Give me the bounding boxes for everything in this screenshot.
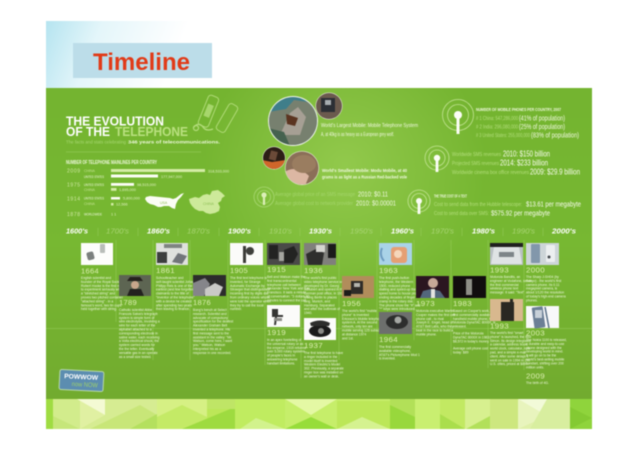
- stat: SMS prices: Average global cost to network provider: [275, 201, 353, 207]
- card: 2003: 2003: [526, 330, 545, 338]
- card: 1963: The phone show the "#" and: [379, 303, 421, 307]
- card: 1919: answering telephone: [267, 358, 298, 362]
- card: 1937: a ringer included in the: [304, 355, 338, 359]
- timeline decade header: 1860's: [147, 226, 170, 236]
- card: 1861: 1861: [156, 268, 175, 275]
- card: 1905: The first text telephone is: [230, 276, 267, 280]
- card: 2000: Sanyo) - the world's first: [526, 279, 561, 283]
- card: 1876: invented a telephone. His: [193, 328, 231, 332]
- map: United States: USA: [160, 201, 168, 205]
- card: 1993 pager: message: It said: "Text": [490, 291, 525, 295]
- card: 2000: of today's high-end camera: [526, 294, 566, 298]
- infographic heading: OF THE: [66, 125, 110, 139]
- stat: mobile phones per country: (41% of population): [519, 116, 565, 122]
- timeline decade header: [66, 226, 576, 236]
- timeline decade header: 1950's: [350, 226, 373, 236]
- stat: SMS revenues: Projected SMS revenues: [452, 161, 499, 167]
- card: 1905: they try to call the local: [230, 303, 264, 307]
- row: 1914: 12,566: [116, 202, 128, 206]
- card: 2000: [526, 243, 566, 302]
- card: 1964: is invented.: [379, 357, 396, 361]
- card: 1664: to experiment seriously with: [81, 288, 122, 292]
- stat: SMS revenues: Worldwide cinema box office revenues: [452, 170, 529, 176]
- map: China: CHINA: [203, 202, 215, 206]
- card: 1789: as a small size tested.: [119, 355, 152, 359]
- icon: antenna, SMS revenues: [425, 146, 449, 172]
- card: 1993 smartphone: Simon. Its design integrates: [490, 339, 531, 343]
- card: 1937: [304, 318, 344, 378]
- card: 1789: the the letter. Eventually: [119, 347, 155, 351]
- card: 1876: [193, 275, 233, 355]
- row: 1914: 5,800,000: [123, 196, 140, 200]
- card: 1789: Catholic scientist Abbe: [119, 308, 152, 312]
- card: 1915: first transcontinental: [267, 279, 297, 283]
- row: 2009: UNITED STATES: [84, 175, 104, 179]
- card: 1956: Ericsson's Mobile telephone: [342, 317, 383, 321]
- chart: telephone mainlines per country: [66, 160, 229, 218]
- timeline decade header: 1980's: [472, 226, 495, 236]
- card: 1905: Automatic Exchange by: [230, 284, 265, 288]
- card: 1983: Motorola DynaTAC 8000X, is: [453, 321, 496, 325]
- chart: telephone mainlines per country: NUMBER OF TELEPHONE MAINLINES PER COUNTRY: [66, 160, 157, 166]
- card: 1956: system A. At the second: [342, 321, 377, 325]
- card: 1983: [453, 276, 496, 354]
- card: 1919: the emperor, 1919 reforms: [267, 346, 306, 350]
- callout: largest mobile: A, at 40kg is as heavy as a European grey wolf.: [321, 132, 394, 138]
- card: 1956: 1956: [342, 301, 361, 308]
- card: 1963: speed home to house process: [379, 292, 424, 296]
- stat: SMS prices: Average global price of an SMS message: [275, 192, 355, 198]
- card: 1664: Robert Hooke is the first man: [81, 284, 124, 288]
- card: 1963: [379, 243, 424, 311]
- card: 1876: response in one recorded.: [193, 351, 231, 355]
- stat: SMS revenues: Worldwide SMS revenues: [452, 152, 501, 158]
- card: 1664: 1664: [81, 268, 99, 276]
- row: 1914: UNITED STATES: [84, 196, 104, 200]
- stat: SMS prices: [275, 192, 396, 208]
- card: 1956: The world's first "mobile: [342, 309, 377, 313]
- icon: telephone handset outline: [194, 94, 239, 133]
- card: 1936: Hamburg. Separated: [304, 303, 335, 307]
- card: 1963: telephone, the Western: [379, 280, 413, 284]
- card: 1861: self-taught scientist Johann: [156, 280, 196, 284]
- card: 1919: of people's faces in: [267, 354, 295, 358]
- card: 1915: telephone call between: [267, 283, 301, 287]
- card: 1861: with a device he created: [156, 299, 192, 303]
- card: 1861: [156, 243, 196, 311]
- stat: SMS revenues: 2009: $29.9 billion: [530, 168, 580, 176]
- card: 1876: interpreted his as a: [193, 347, 221, 351]
- card: 1789: versatile gas in an operate: [119, 351, 158, 355]
- photo: mouse in hand: [285, 151, 319, 186]
- card: 1915: of conversation: "3 dollars 90: [267, 294, 310, 298]
- card: 1861: after spending two years: [156, 303, 192, 307]
- row: 1975: [67, 182, 156, 192]
- card: 1983: Price of the Motorola: [453, 332, 484, 336]
- timeline decade header: 1990's: [512, 226, 535, 236]
- card: 1973: beat in the race to build a: [416, 328, 453, 332]
- slide title: Timeline: Timeline: [93, 49, 190, 76]
- card: 1664: a "stretched string" and: [81, 292, 115, 296]
- card: 1937: 1937: [304, 343, 323, 350]
- card: 1936: [304, 243, 346, 315]
- card: 1789: 1789: [119, 300, 137, 307]
- card: 1936: Schubert and opened in the: [304, 288, 345, 292]
- card: 1973: 1973: [416, 301, 435, 308]
- card: 1876: you." Watson, Watson: [193, 343, 225, 347]
- card: 1789: saline water, each receiving: [119, 335, 160, 339]
- card: 1993 pager: engineer at Vodafone, sends: [490, 279, 532, 283]
- card: 1983: Average cell phone cost: [453, 346, 488, 350]
- card: 2003: developing world in mind.: [526, 350, 563, 354]
- card: 1876: specification for the deafest: [193, 320, 233, 324]
- card: 1905: Strowger that distinguished: [230, 288, 270, 292]
- card: 1789: Francois Salva's telegraph: [119, 312, 158, 316]
- card: 1664: founder of the Royal Society: [81, 280, 123, 284]
- card: 1964: AT&T's Picturephone Mod 1: [379, 353, 420, 357]
- card: 1936: German post office, in 1936,: [304, 292, 345, 296]
- card: 1876: assistant in the valley: "Mr.: [193, 335, 232, 339]
- card: 1973: mobile phone.: [416, 332, 437, 336]
- card: 1876: Alexander Graham Bell: [193, 324, 227, 328]
- card: 1915: 1915: [267, 267, 286, 274]
- footer triangle band: [46, 399, 592, 429]
- card: 1789: [119, 275, 160, 359]
- card: 1973: Joseph E. Engel, head of: [416, 321, 453, 325]
- card: 1664: English scientist and: [81, 276, 111, 280]
- card: 1993 smartphone: The world's first "smart: [490, 331, 523, 335]
- row: 1914: [67, 196, 140, 206]
- stat: true cost of a text: $575.92 per megabyte: [491, 208, 550, 218]
- stat: true cost of a text: Cost to send data from the Hubble telescope:: [434, 202, 522, 208]
- card: 1915: Alexander New York and San: [267, 287, 310, 291]
- card: 1964: 1964: [379, 337, 398, 344]
- card: 1919: over 5,000 rotary systems: [267, 350, 305, 354]
- icon: antenna, mobile phones: [442, 100, 474, 134]
- card: 2003: a durable and easy-to-use: [526, 342, 564, 346]
- card: 2000: megapixel camera, is: [526, 287, 558, 291]
- card: 1876: research. Scientist and: [193, 312, 227, 316]
- stat: true cost of a text: Cost to send data over SMS:: [434, 211, 489, 217]
- card: 1936: 1940.: [304, 311, 312, 315]
- card: 1973: [416, 276, 455, 336]
- card: 1973: Motorola executive Martin: [416, 309, 454, 313]
- timeline decade header: 1870's: [187, 226, 210, 236]
- card: 1936: linking Berlin to places: [304, 296, 337, 300]
- card: 1905: invented, for Strange: [230, 280, 261, 284]
- card: 1993 smartphone: phone" is launched, the IBM: [490, 335, 531, 339]
- card: 1915: Bell and Watson make the: [267, 275, 306, 279]
- stat: true cost of a text: THE TRUE COST OF A TEXT: [434, 194, 467, 198]
- stat: mobile phones per country: # 1 China: 547,286,000: [476, 116, 518, 122]
- row: 1878: [67, 212, 116, 218]
- card: 1963: cramp in the rotary dial.: [379, 299, 414, 303]
- card: 1993 pager: [490, 243, 532, 295]
- card: 1915: minutes to connect the call.: [267, 298, 307, 302]
- card: 1876: Watson, come here, I want: [193, 339, 232, 343]
- card: 1983: $8,572 in today's money.: [453, 339, 489, 343]
- card: 1963: ending decades of finger: [379, 296, 416, 300]
- card: 1956: mobile serving 125 subscrib: [342, 328, 383, 332]
- card: 1983: DynaTAC 8000X in 1983:: [453, 336, 490, 340]
- card: 1993 smartphone: client. After some delays it: [490, 354, 528, 358]
- stat: true cost of a text: [434, 194, 581, 218]
- card: 2003: million units.: [526, 365, 544, 369]
- card: 1993 smartphone: [490, 299, 531, 366]
- card: 1956: and 1st.: [342, 336, 354, 340]
- card: 1983: today: $89: [453, 350, 469, 354]
- photo: wolf comparison: [268, 96, 318, 146]
- timeline decade header: 1960's: [391, 226, 414, 236]
- card: 1963: 1963: [379, 268, 398, 275]
- card: 1937: an owner's wall or desk.: [304, 374, 339, 378]
- card: 2003: [526, 306, 567, 369]
- callout: largest mobile: [321, 123, 418, 138]
- row: 1975: 98,515,000: [137, 183, 156, 187]
- card: 1664: held together with string.: [81, 307, 117, 311]
- row: 2009: 177,947,000: [161, 175, 182, 179]
- card: 1861: claimants to the title of: [156, 292, 189, 296]
- stat: SMS revenues: 2014: $233 billion: [500, 158, 548, 168]
- row: 1975: 1975: [67, 182, 80, 188]
- callout: smallest mobile: [322, 168, 407, 180]
- map: United States: [145, 193, 184, 209]
- stat: mobile phones per country: (25% of population): [519, 124, 565, 131]
- card: 1876: first message sent to the: [193, 331, 229, 335]
- card: 1993 smartphone: 1993: [490, 324, 509, 330]
- stat: SMS revenues: 2010: $150 billion: [503, 150, 550, 158]
- slide title: Timeline: [73, 43, 212, 78]
- card: 1983: first commercially available: [453, 313, 493, 317]
- stat: true cost of a text: $13.61 per megabyte: [526, 200, 581, 208]
- photo: large mobile radio: [315, 92, 343, 120]
- card: 1964: [379, 312, 420, 361]
- card: 2003: world's best-selling mobile: [526, 358, 565, 362]
- card: 1993 smartphone: pad, and a simple e-mail: [490, 350, 526, 354]
- card: 1789: a Volta electrical shock, the: [119, 339, 159, 343]
- card: 1937: 302. Previously, a separate: [304, 367, 344, 371]
- callout: smallest mobile: World's Smallest Mobile: Modu Mobile, at 40: [322, 168, 407, 173]
- row: 1878: 1878: [67, 212, 80, 218]
- card: 1963: 1500, reduced phone: [379, 284, 410, 288]
- card: 1861: Philipp Reis is one of the: [156, 284, 192, 288]
- card: 1964: The first commercially: [379, 345, 411, 349]
- card: 1963: The first push-button: [379, 276, 409, 280]
- card: 1861: "inventor of the telephone": [156, 296, 195, 300]
- timeline decade header: 1930's: [309, 226, 332, 236]
- timeline decade header: 1600's: [66, 226, 88, 236]
- stat: mobile phones per country: (83% of population): [531, 132, 579, 140]
- card: 1973: Cooper makes the first cell: [416, 313, 455, 317]
- card: 1919: [267, 305, 306, 365]
- card: 1919: In an apex foretelling of: [267, 338, 301, 342]
- card: 1983: handheld mobile phone, the: [453, 317, 494, 321]
- row: 1975: UNITED STATES: [84, 183, 104, 187]
- card: 2000: The Sharp J-SH04 (by: [526, 275, 559, 279]
- card: 1937: ringer box was installed on: [304, 370, 343, 374]
- card: 1956: phone" is invented: [342, 313, 369, 317]
- card: 1983: Based on Cooper's work, the: [453, 309, 495, 313]
- card: 2000: phones.: [526, 298, 538, 302]
- logo: Powwow Now: [59, 369, 104, 392]
- stat: mobile phones per country: # 2 India: 296,080,000: [476, 124, 518, 130]
- card: 1973: phone call - to rival: [416, 317, 444, 321]
- photo: tiny phone in hand: [262, 146, 286, 170]
- card: 1956: at distance 1974: [342, 332, 366, 336]
- card: 2003: The Nokia 1100 is released,: [526, 338, 567, 342]
- row: 1878: 1 1: [111, 212, 116, 216]
- card: 2009: [526, 374, 549, 385]
- card: 2009: 2009: [526, 374, 545, 380]
- card: 1936: developed by Dr. Georg: [304, 284, 339, 288]
- timeline decade header: 1900's: [228, 226, 251, 236]
- card: 1936: and after the outbreak of: [304, 307, 340, 311]
- stat: SMS prices: 2010: $0.11: [358, 192, 388, 198]
- stat: mobile phones per country: NUMBER OF MOBILE PHONES PER COUNTRY, 2007: [476, 107, 561, 112]
- icon: antenna, average price: [254, 187, 274, 207]
- card: 1936: video telephone service was: [304, 280, 346, 284]
- card: 1956: network, only ten are: [342, 325, 373, 329]
- row: 2009: 2009: [67, 168, 80, 174]
- card: 1789: wire for each letter of the: [119, 324, 155, 328]
- card: 2000: about 1/120 the resolution: [526, 291, 564, 295]
- card: 1919: 1919: [267, 330, 286, 337]
- infographic heading: TELEPHONE: [115, 125, 188, 139]
- card: 1664: famous's word, two tin cups: [81, 303, 122, 307]
- card: 1993 smartphone: U.S. cities, priced at $899.: [490, 362, 529, 366]
- infographic heading: [66, 114, 220, 144]
- card: 1905: were told the operator when: [230, 299, 271, 303]
- row: 1914: 1914: [67, 196, 80, 202]
- infographic heading: THE EVOLUTION: [66, 114, 164, 128]
- stat: mobile phones per country: [476, 107, 579, 140]
- logo: Powwow Now: POWWOW: [64, 373, 99, 382]
- green infographic panel: [46, 88, 592, 399]
- card: 1789: system is simple form of: [119, 316, 154, 320]
- card: 1876: advocate of compulsory: [193, 316, 228, 320]
- callout: largest mobile: World's Largest Mobile: Mobile Telephone System: [321, 123, 418, 129]
- card: 1973: AT&T Bell Labs, who they: [416, 325, 454, 329]
- card: 1861: then leaving to finance.: [156, 307, 190, 311]
- card: 1789: corresponding electrode in: [119, 331, 158, 335]
- card: 2000: camera phone. Its 0.11: [526, 283, 560, 287]
- card: 1956: [342, 276, 383, 340]
- card: 1664: "attached string" - in a: [81, 299, 113, 303]
- infographic heading: The facts and stats celebrating: [66, 140, 127, 144]
- card: 1963: "*" keys were introduced.: [379, 307, 416, 311]
- card: 2003: It will go on to be the: [526, 354, 556, 358]
- card: 2003: phone designed with the: [526, 346, 562, 350]
- card: 1993 pager: Motorola Bandits, an: [490, 275, 520, 279]
- logo: Powwow Now: now NOW: [72, 381, 99, 389]
- timeline decade header: 2000's: [551, 226, 576, 236]
- card: 1937: model itself is invented: [304, 359, 338, 363]
- card: 1919: the universal rotary or as: [267, 342, 304, 346]
- card: 1789: system carried words for: [119, 343, 156, 347]
- stat: SMS revenues: [452, 150, 580, 176]
- slide header band: [46, 21, 592, 88]
- photo circles: world's largest and smallest mobile phones: [262, 92, 343, 186]
- card: 1993 pager: wireless phone text: [490, 287, 518, 291]
- card: 1664: [81, 243, 124, 311]
- row: 1878: WORLDWIDE: [84, 212, 103, 216]
- card: 1905: [230, 243, 271, 311]
- card: 1789: alphabet attached to a: [119, 328, 152, 332]
- card: 1664: proves two pitched container: [81, 296, 124, 300]
- icon: antenna, true cost of a text: [408, 190, 430, 214]
- card: 1983: 1983: [453, 301, 472, 308]
- card: 1993 pager: 1993: [490, 268, 509, 274]
- row: 2009: [67, 168, 229, 179]
- card: 1936: The world's first public: [304, 276, 337, 280]
- infographic heading: 346 years of telecommunications.: [128, 140, 220, 144]
- card: 1963: dialling and speed-up the: [379, 288, 416, 292]
- card: 1861: earliest (and few forgotten): [156, 288, 195, 292]
- card: 1915: [267, 243, 310, 302]
- row: 2009: 318,533,000: [208, 170, 229, 174]
- card: 1876: 1876: [193, 300, 211, 307]
- card: 1905: from ordinary voices whose: [230, 296, 270, 300]
- card: 1937: Western Electric's Model: [304, 363, 340, 367]
- card: 2000: 2000: [526, 268, 545, 274]
- row: 2009: CHINA: [84, 169, 96, 173]
- card: 1915: Francisco. It lasts a minute: [267, 291, 306, 295]
- stat: SMS prices: 2010: $0.00001: [356, 200, 396, 208]
- card: 2009: The birth of 4G.: [526, 381, 549, 385]
- card: 1861: Schoolteacher and: [156, 276, 184, 280]
- card: 1936: 1936: [304, 268, 323, 275]
- callout: smallest mobile: grams is as light as a Russian Red-backed vole: [322, 174, 407, 180]
- timeline decade header: 1700's: [106, 226, 129, 236]
- card: 1993 smartphone: a calendar, address book,: [490, 343, 528, 347]
- row: 1975: 1,695,000: [119, 188, 136, 192]
- card: 1993 pager: the first commercial: [490, 283, 519, 287]
- card: 1983: released.: [453, 325, 467, 329]
- card: 1964: available videophone,: [379, 349, 411, 353]
- card: 1905: 1905: [230, 268, 248, 275]
- card: 1919: handset limitations.: [267, 361, 295, 365]
- card: 1937: The first telephone to have: [304, 351, 343, 355]
- stat: mobile phones per country: # 3 United States: 255,000,000: [476, 133, 530, 139]
- card: 1936: long. Munich, and: [304, 299, 330, 303]
- card: 1876: Bong's bench at Select: [193, 308, 227, 312]
- timeline decade header: 1970's: [431, 226, 454, 236]
- card: 1905: incoming first by digits dial: [230, 292, 269, 296]
- card: 1993 smartphone: went on sale in 1994 in 190: [490, 358, 530, 362]
- map: China: [189, 190, 225, 214]
- row: 1914: CHINA: [84, 202, 96, 206]
- row: 1975: CHINA: [84, 188, 96, 192]
- card: 1993 smartphone: world clock, calculator, note: [490, 347, 530, 351]
- timeline decade header: 1910's: [269, 226, 292, 236]
- card: 1789: wire electrolysis, involving a: [119, 320, 160, 324]
- card: 2003: handset, shifting over 200: [526, 361, 564, 365]
- card: 1905: number.: [230, 307, 242, 311]
